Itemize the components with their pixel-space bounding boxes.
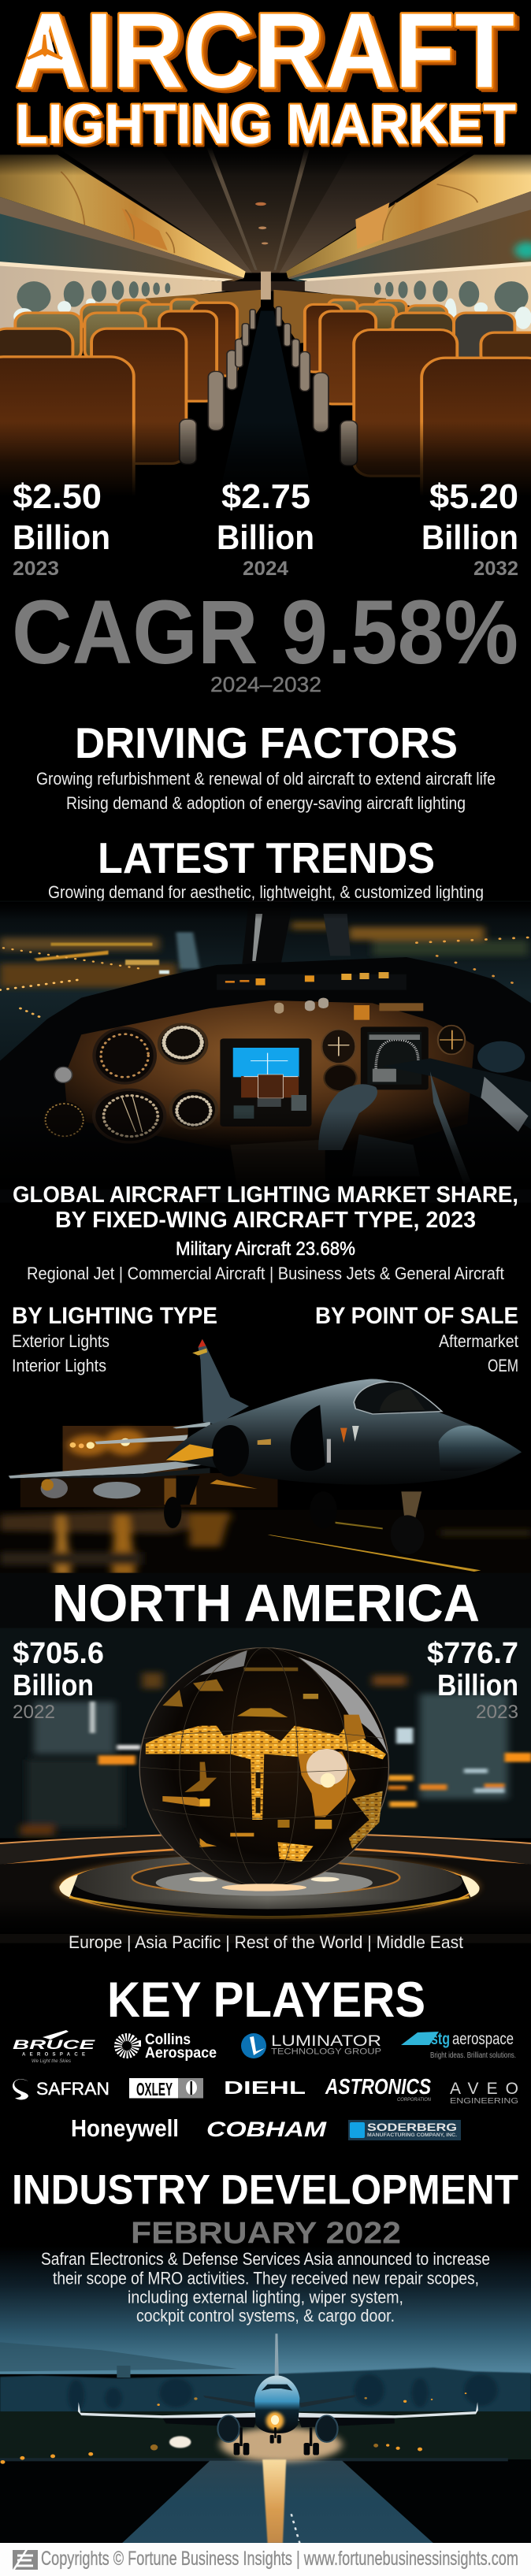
stat: 2023: 2023 xyxy=(13,558,59,580)
development description: their scope of MRO activities. They received new repair scopes, xyxy=(53,2269,479,2288)
section: north america heading xyxy=(13,1574,518,1952)
section: key players: KEY PLAYERS xyxy=(107,1973,425,2028)
logo: Safran: SAFRAN xyxy=(36,2079,110,2099)
stat: 2032: Billion xyxy=(421,518,518,557)
logo: Soderberg xyxy=(348,2120,461,2140)
stat: 2023 xyxy=(427,1637,518,1723)
logo: Luminator: LUMINATOR xyxy=(271,2033,381,2050)
stat: 2022: 2022 xyxy=(13,1702,55,1723)
logo: Collins Aerospace: Aerospace xyxy=(145,2045,217,2062)
stat: 2022: Billion xyxy=(13,1669,94,1702)
by lighting type xyxy=(12,1303,217,1375)
ceiling panels xyxy=(58,147,474,273)
airfield ground xyxy=(0,2411,531,2461)
section: north america heading: NORTH AMERICA xyxy=(52,1574,480,1633)
runway xyxy=(122,2461,433,2543)
armrests xyxy=(180,306,357,466)
region list: Europe | Asia Pacific | Rest of the World | Middle East xyxy=(69,1932,463,1952)
globe base glow xyxy=(189,1877,340,1891)
lower console xyxy=(230,1140,325,1187)
stat: 2024: $2.75 xyxy=(221,477,310,516)
logo: Cobham: COBHAM xyxy=(206,2118,327,2141)
by lighting type: Exterior Lights xyxy=(12,1331,110,1351)
logo: STG Aerospace: aerospace xyxy=(452,2030,514,2048)
night sky and city xyxy=(0,900,531,1085)
stats row xyxy=(13,477,518,580)
aisle xyxy=(217,311,315,507)
by point of sale: BY POINT OF SALE xyxy=(315,1303,518,1329)
cockpit windows xyxy=(262,2385,292,2391)
right display xyxy=(361,1026,429,1089)
tree line xyxy=(0,2366,531,2414)
stat: 2023: $2.50 xyxy=(13,477,102,516)
logo: Honeywell: Honeywell xyxy=(71,2114,179,2142)
runway centre dashes xyxy=(291,2514,299,2543)
section: latest trends xyxy=(48,833,484,902)
section: industry development xyxy=(12,2166,518,2325)
distant hills xyxy=(0,2342,237,2371)
development description: cockpit control systems, & cargo door. xyxy=(136,2306,395,2325)
title xyxy=(15,0,519,158)
section: driving factors: Rising demand & adoption of energy-saving aircraft lighting xyxy=(66,793,466,813)
landing gear xyxy=(164,1475,425,1554)
photo: cockpit at night xyxy=(0,900,531,1203)
development description xyxy=(41,2249,490,2325)
stat: 2032: $5.20 xyxy=(429,477,518,516)
control yoke xyxy=(318,1041,531,1184)
engines xyxy=(217,2415,338,2442)
globe highlights xyxy=(183,1650,388,1754)
logo: Luminator: TECHNOLOGY GROUP xyxy=(271,2047,381,2056)
by point of sale: Aftermarket xyxy=(439,1331,518,1351)
landing light haze xyxy=(220,2427,342,2462)
jet canopy xyxy=(354,1382,442,1414)
stat: 2023: Billion xyxy=(13,518,110,557)
logo: Astronics: ASTRONICS xyxy=(325,2074,431,2099)
logo: Bruce Aerospace xyxy=(13,2030,95,2064)
photo fade overlays xyxy=(0,902,531,919)
section: latest trends: LATEST TRENDS xyxy=(98,833,435,882)
logo: Astronics: CORPORATION xyxy=(397,2097,431,2103)
section: market share heading: GLOBAL AIRCRAFT LIGHTING MARKET SHARE, xyxy=(13,1182,518,1208)
dashboard xyxy=(0,957,531,1203)
annunciator lights xyxy=(217,972,423,1020)
jet engine intakes xyxy=(212,1405,325,1476)
stat: 2022: $705.6 xyxy=(13,1637,104,1670)
platform rings xyxy=(0,1833,531,1943)
cabin walls and windows xyxy=(0,265,531,346)
logo: Safran xyxy=(13,2079,110,2099)
far seat rows xyxy=(146,290,386,343)
landing gear xyxy=(234,2427,319,2455)
stat: 2023: Billion xyxy=(437,1669,518,1702)
stat: 2032: 2032 xyxy=(473,558,518,580)
jet wing and stabiliser xyxy=(9,1435,210,1479)
stat: 2023: 2023 xyxy=(476,1702,518,1723)
logo: Aveo Engineering: ENGINEERING xyxy=(450,2097,518,2106)
logo: STG Aerospace: stg xyxy=(431,2030,450,2048)
stat: 2024: 2024 xyxy=(243,558,288,580)
instrument panel xyxy=(65,1000,474,1150)
photo: aircraft cabin interior xyxy=(0,147,531,543)
jet tail xyxy=(173,1339,249,1428)
stat: 2024 xyxy=(217,477,314,580)
title line: LIGHTING MARKET: LIGHTING MARKET xyxy=(18,96,516,158)
photo: glowing globe on platform xyxy=(0,1573,531,1943)
landing light xyxy=(266,2411,284,2429)
airliner xyxy=(78,2333,478,2455)
left overhead bin xyxy=(0,154,246,281)
logo: Soderberg: MANUFACTURING COMPANY, INC. xyxy=(367,2132,457,2138)
globe grid lines xyxy=(140,1648,388,1887)
photo: military jet on wet apron xyxy=(0,1339,531,1578)
CAGR callout: 2024–2032 xyxy=(210,673,321,696)
section: key players xyxy=(13,1973,518,2142)
globe photo bottom fade xyxy=(0,1899,531,1934)
runway edge lights xyxy=(0,2392,466,2464)
hangar building and lights xyxy=(20,1426,277,1507)
left seats xyxy=(0,299,237,536)
glowing continents xyxy=(146,1668,386,1861)
horizontal stabilisers xyxy=(203,2395,355,2407)
section: latest trends: Growing demand for aesthetic, lightweight, & customized lighting xyxy=(48,882,484,902)
fuselage xyxy=(254,2375,299,2433)
right seats xyxy=(305,300,531,538)
logo: Diehl: DIEHL xyxy=(224,2077,306,2098)
jet fuselage xyxy=(166,1379,522,1485)
section: market share heading xyxy=(13,1182,518,1283)
logo: STG Aerospace xyxy=(401,2030,516,2060)
instrument gauges xyxy=(43,1024,465,1142)
logo: Bruce Aerospace: AEROSPACE xyxy=(22,2053,85,2058)
by point of sale: OEM xyxy=(488,1356,518,1375)
by point of sale xyxy=(315,1303,518,1375)
blurred city background xyxy=(0,1573,531,1838)
section: industry development: FEBRUARY 2022 xyxy=(131,2217,401,2250)
section: market share heading: BY FIXED-WING AIRCRAFT TYPE, 2023 xyxy=(55,1208,476,1233)
centre flight display xyxy=(220,1038,311,1127)
logo: Luminator xyxy=(241,2033,381,2058)
photo: airliner on wet runway at dusk xyxy=(0,2247,531,2544)
icon: Fortune Business Insights logo xyxy=(13,2550,38,2570)
logo: Aveo Engineering xyxy=(450,2080,518,2106)
vehicle headlights xyxy=(169,2437,191,2448)
stat: 2022 xyxy=(13,1637,104,1723)
section: driving factors xyxy=(36,718,496,813)
wet ground reflections xyxy=(0,1510,531,1578)
jet nose cone xyxy=(439,1425,522,1471)
stat: 2024: Billion xyxy=(217,518,314,557)
logo: Soderberg: SODERBERG xyxy=(367,2121,457,2133)
logo: Oxley: OXLEY xyxy=(136,2079,173,2099)
dusk sky xyxy=(0,2247,531,2374)
right overhead bin xyxy=(286,154,531,281)
development description: including external lighting, wiper system, xyxy=(128,2288,403,2307)
section: market share heading: Military Aircraft 23.68% xyxy=(176,1238,355,1260)
by lighting type: BY LIGHTING TYPE xyxy=(12,1303,217,1329)
tail fin xyxy=(275,2333,279,2377)
rear centre wall xyxy=(222,281,305,291)
logo: Collins Aerospace xyxy=(115,2032,217,2062)
icon: airplane in letter A xyxy=(27,32,63,66)
logo: Collins Aerospace: Collins xyxy=(145,2032,191,2048)
stat: 2023 xyxy=(13,477,110,580)
section: segmentation lists xyxy=(12,1303,518,1375)
footer bar xyxy=(0,2543,531,2576)
by lighting type: Interior Lights xyxy=(12,1356,106,1375)
jet amber highlights and markings xyxy=(166,1426,359,1489)
globe xyxy=(139,1648,388,1891)
wing pods xyxy=(41,1479,140,1498)
windshield pillars xyxy=(242,900,351,963)
wings xyxy=(78,2402,478,2427)
logo: Aveo Engineering: AVEO xyxy=(450,2080,518,2098)
section: driving factors: DRIVING FACTORS xyxy=(75,718,458,767)
stat: 2023: $776.7 xyxy=(427,1637,518,1670)
photo fade overlays xyxy=(0,147,531,176)
logo: Bruce Aerospace: BRUCE xyxy=(13,2037,95,2052)
stat: 2032 xyxy=(421,477,518,580)
logo: Bruce Aerospace: We Light the Skies xyxy=(32,2058,72,2064)
title line: LIGHTING MARKET: LIGHTING MARKET xyxy=(15,94,516,156)
runway light reflection xyxy=(262,2459,286,2543)
